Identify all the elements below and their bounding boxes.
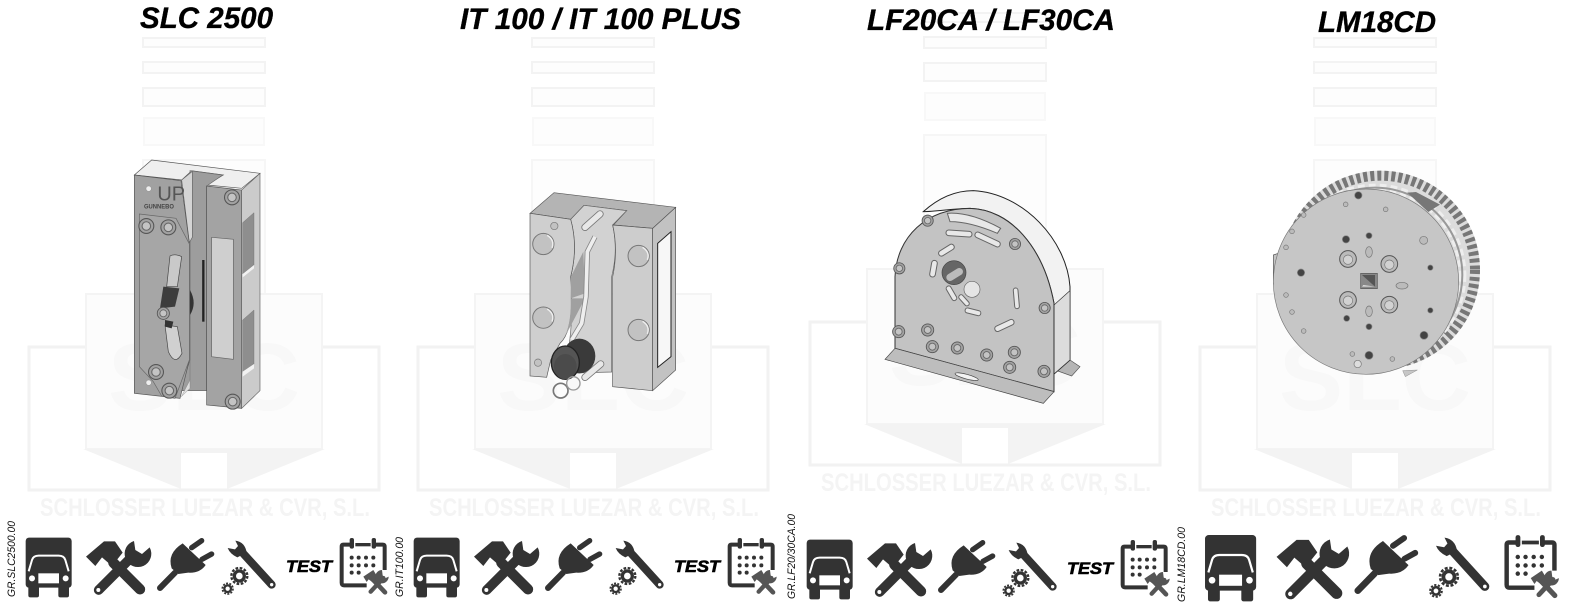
- icon row: LM18CD: [1205, 535, 1559, 601]
- icon: plug: [941, 543, 993, 590]
- icon: wrench and gears: [1430, 538, 1487, 597]
- icon: calendar with tools: [342, 538, 389, 592]
- test label 1: TEST: [286, 557, 334, 576]
- title: SLC 2500: SLC 2500: [140, 2, 273, 35]
- icon: hammer and wrench: [867, 543, 932, 594]
- test label 2: TEST: [674, 557, 722, 576]
- title: IT 100 / IT 100 PLUS: IT 100 / IT 100 PLUS: [460, 3, 741, 36]
- icon row: LF20CA: [807, 540, 1170, 599]
- icon: truck: [414, 538, 460, 597]
- product: LF20CA / LF30CA drum: [885, 191, 1080, 403]
- label: GR.IT100.00: GR.IT100.00: [394, 536, 406, 597]
- product: SLC 2500 mechanism: GUNNEBO: [144, 205, 174, 211]
- icon: truck: [1205, 535, 1256, 601]
- icon: hammer and wrench: [474, 541, 539, 592]
- icon: calendar with tools: [730, 538, 777, 592]
- icon: truck: [807, 540, 853, 599]
- icon: wrench and gears: [222, 541, 273, 594]
- icon: hammer and wrench: [1277, 539, 1349, 596]
- product: LM18CD gear disc: [1273, 171, 1480, 377]
- icon: calendar with tools: [1507, 535, 1559, 595]
- title: LM18CD: LM18CD: [1318, 6, 1436, 39]
- icon: calendar with tools: [1123, 540, 1170, 594]
- watermark: panel 1: [29, 38, 379, 522]
- product: SLC 2500 mechanism: UP: [157, 184, 185, 206]
- icon row: IT 100: [414, 538, 777, 597]
- title: LF20CA / LF30CA: LF20CA / LF30CA: [867, 4, 1115, 37]
- label: GR.LM18CD.00: GR.LM18CD.00: [1176, 526, 1188, 602]
- label: GR.LF20/30CA.00: GR.LF20/30CA.00: [786, 513, 798, 599]
- icon: plug: [160, 541, 212, 588]
- icon row: SLC 2500: [26, 538, 389, 597]
- watermark: panel 4: [1200, 38, 1550, 522]
- watermark: panel 2: [418, 38, 768, 522]
- product: IT 100 mechanism: [530, 193, 676, 398]
- test label 3: TEST: [1067, 559, 1115, 578]
- icon: truck: [26, 538, 72, 597]
- product: SLC 2500 mechanism: [134, 160, 260, 409]
- watermark: panel 3: [810, 13, 1160, 497]
- label: GR.SLC2500.00: GR.SLC2500.00: [6, 520, 18, 597]
- icon: plug: [1358, 538, 1415, 591]
- icon: hammer and wrench: [86, 541, 151, 592]
- icon: wrench and gears: [610, 541, 661, 594]
- icon: plug: [548, 541, 600, 588]
- icon: wrench and gears: [1003, 543, 1054, 596]
